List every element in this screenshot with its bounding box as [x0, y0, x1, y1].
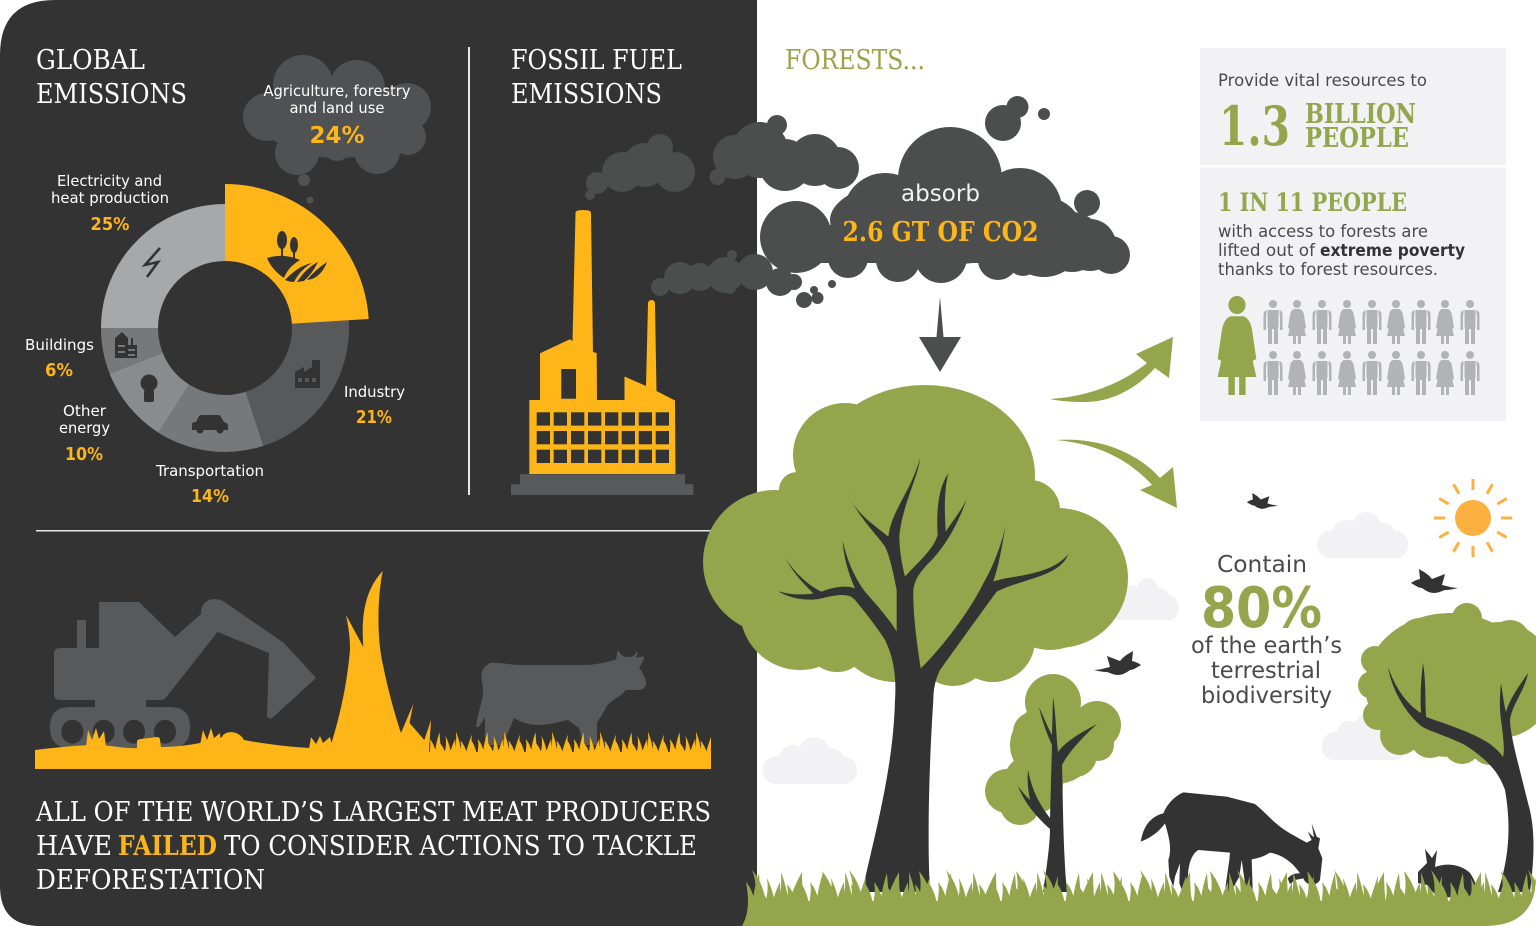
cloud text: absorb 2.6 Gt of CO2: 2.6 GT OF CO2 [842, 217, 1038, 248]
text: 1 in 11 people: thanks to forest resources. [1218, 260, 1438, 280]
label: electricity: 25% [90, 214, 130, 235]
cow [476, 650, 646, 745]
text: 1.3 billion people [1218, 71, 1427, 158]
icon: sun [1434, 479, 1512, 557]
heading: global emissions: GLOBAL [36, 45, 145, 76]
arrow: cloud down to tree [919, 297, 961, 372]
excavator [50, 599, 316, 748]
label: transportation: 14% [191, 486, 229, 507]
icon: buildings [115, 332, 137, 358]
segment: industry 21% [246, 320, 349, 446]
statement: meat producers: ALL OF THE WORLD’S LARGEST MEAT PRODUCERS [35, 797, 711, 828]
label: electricity [51, 172, 169, 235]
statement: meat producers: TO CONSIDER ACTIONS TO TACKLE [224, 831, 697, 862]
text: 1 in 11 people: 1 IN 11 PEOPLE [1218, 188, 1407, 217]
label: electricity: Electricity and [57, 172, 162, 190]
text: 1 in 11 people [1218, 188, 1465, 280]
goat [1141, 792, 1322, 898]
label: transportation [155, 462, 264, 507]
segment: agriculture 24% [225, 184, 369, 324]
grass [742, 870, 1536, 926]
panel: resources and poverty [1200, 48, 1506, 421]
tree trunk and branches [777, 458, 1068, 892]
birds [1094, 493, 1458, 675]
text: 1.3 billion people: BILLION [1305, 99, 1416, 130]
icon: lightning bolt [145, 248, 160, 277]
deforestation scene [35, 571, 711, 769]
text: 80% biodiversity: Contain [1217, 552, 1307, 578]
arrow: tree to biodiversity [1056, 440, 1177, 508]
burning ground and flame [35, 571, 711, 769]
label: other energy [59, 402, 110, 465]
label: buildings: Buildings [25, 336, 94, 354]
icon: one highlighted woman [1218, 296, 1256, 395]
main tree [703, 385, 1128, 892]
thought cloud: agriculture label: and land use [290, 99, 384, 117]
icon: car [192, 415, 228, 434]
rabbit [1418, 849, 1480, 898]
label: industry: 21% [356, 407, 392, 428]
factory illustration [511, 210, 693, 495]
background clouds [763, 512, 1408, 784]
smoke: lower puff [651, 250, 802, 296]
section divider [36, 530, 716, 532]
label: other energy: 10% [65, 444, 103, 465]
icon: farm [267, 231, 327, 282]
thought cloud: agriculture label [243, 55, 431, 204]
heading: fossil fuel emissions: EMISSIONS [511, 79, 662, 110]
text: 80% biodiversity: terrestrial [1211, 658, 1321, 684]
smoke: upper left puff [585, 134, 695, 200]
text: 80% biodiversity [1191, 552, 1342, 709]
label: electricity: heat production [51, 189, 169, 207]
panel divider [468, 47, 470, 495]
heading: global emissions: EMISSIONS [36, 79, 187, 110]
heading: fossil fuel emissions [511, 45, 682, 110]
statement: meat producers [35, 797, 711, 896]
CO2 cloud body [760, 96, 1130, 308]
tree crown [703, 385, 1128, 686]
text: 1.3 billion people: PEOPLE [1305, 123, 1409, 154]
thought cloud: agriculture label: 24% [310, 123, 364, 149]
label: other energy: energy [59, 419, 110, 437]
label: industry: Industry [344, 383, 405, 401]
statement: meat producers: HAVE [36, 831, 112, 862]
text: 1.3 billion people: 1.3 [1219, 94, 1290, 158]
right tree [1358, 603, 1536, 892]
pictogram: people row one and two [1264, 300, 1480, 395]
smoke and CO2 cloud [585, 96, 1130, 308]
label: buildings [25, 336, 94, 381]
heading: forests: FORESTS... [785, 45, 925, 76]
text: 1 in 11 people: lifted out of [1218, 241, 1316, 261]
donut chart: global emissions by sector [25, 172, 405, 507]
statement: meat producers: DEFORESTATION [36, 865, 265, 896]
thought cloud: agriculture label: Agriculture, forestry [264, 82, 411, 100]
heading: global emissions [36, 45, 187, 110]
segment: electricity 25% [101, 204, 225, 328]
label: industry [344, 383, 405, 428]
cloud text: absorb 2.6 Gt of CO2 [842, 181, 1038, 248]
text: 80% biodiversity: biodiversity [1201, 683, 1332, 709]
label: buildings: 6% [45, 360, 73, 381]
text: 80% biodiversity: of the earth’s [1191, 633, 1342, 659]
segment: transportation 14% [158, 384, 263, 452]
text: 1 in 11 people: extreme poverty [1320, 241, 1465, 261]
panel: dark emissions background [0, 0, 757, 926]
cloud text: absorb 2.6 Gt of CO2: absorb [901, 181, 980, 207]
label: transportation: Transportation [155, 462, 264, 480]
arrow: tree to resources [1050, 337, 1173, 402]
icon: light bulb [140, 374, 158, 402]
heading: fossil fuel emissions: FOSSIL FUEL [511, 45, 682, 76]
segment: other energy 10% [110, 353, 189, 433]
icon: factory [295, 360, 320, 388]
smoke: upper right puff [710, 115, 859, 191]
label: other energy: Other [63, 402, 107, 420]
small tree [985, 674, 1121, 892]
text: 80% biodiversity: 80% [1201, 576, 1322, 641]
text: 1 in 11 people: with access to forests are [1218, 222, 1428, 242]
segment: buildings 6% [101, 328, 163, 374]
statement: meat producers: FAILED [118, 831, 217, 862]
text: 1.3 billion people: Provide vital resources to [1218, 71, 1427, 91]
